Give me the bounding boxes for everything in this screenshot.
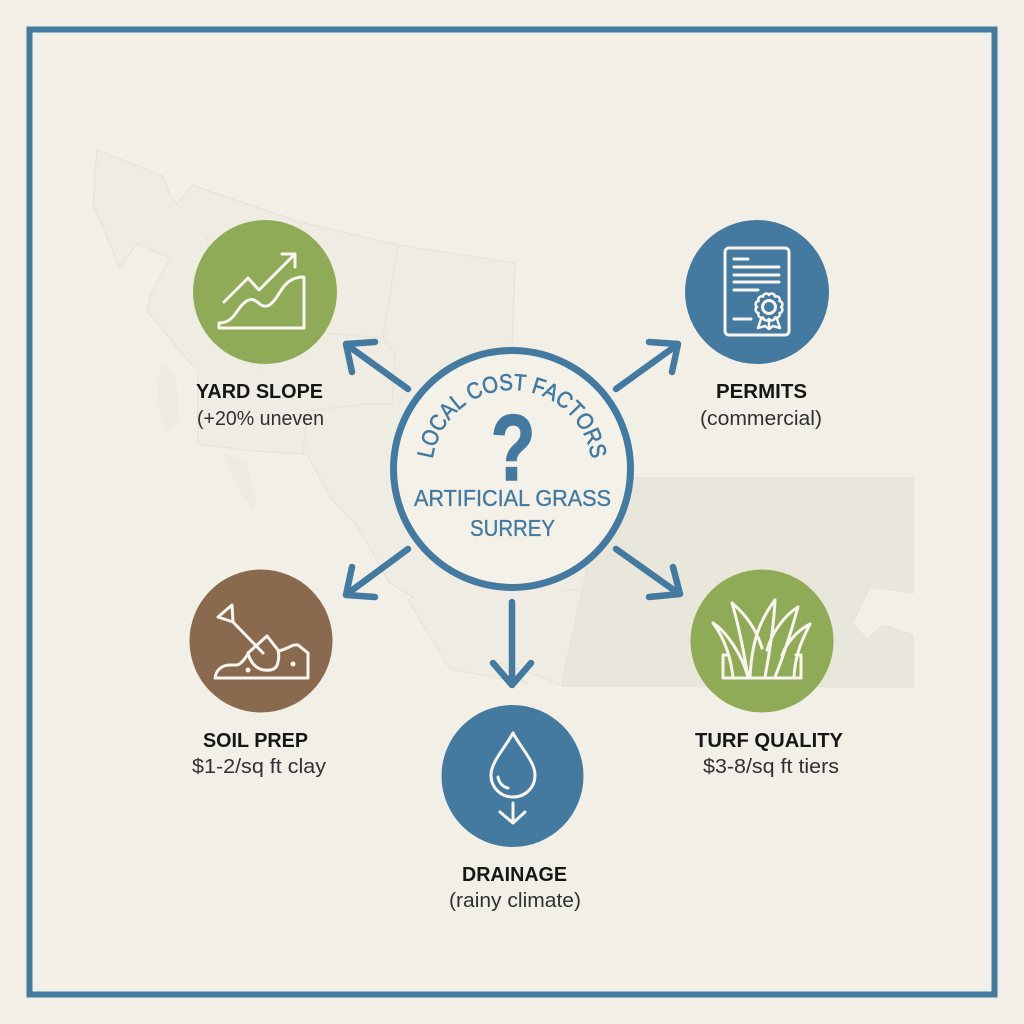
icon: water drop with arrow bbox=[491, 733, 535, 823]
arrow: to soil prep bbox=[346, 549, 408, 597]
arrow: to drainage bbox=[493, 602, 531, 685]
label: turf quality: TURF QUALITY bbox=[695, 730, 844, 752]
arrow: to permits bbox=[616, 342, 678, 389]
label: permits: PERMITS bbox=[716, 381, 807, 403]
factor: yard slope bbox=[193, 220, 337, 430]
factor: permits bbox=[685, 220, 829, 430]
soil dots bbox=[246, 662, 296, 672]
detail: permits: (commercial) bbox=[700, 408, 822, 430]
detail: yard slope: (+20% uneven bbox=[197, 408, 324, 430]
faint regional map bbox=[93, 150, 913, 687]
hub location: SURREY bbox=[470, 515, 555, 541]
hub title: LOCAL COST FACTORS bbox=[417, 374, 606, 458]
detail: turf quality: $3-8/sq ft tiers bbox=[703, 756, 839, 778]
detail: soil prep: $1-2/sq ft clay bbox=[192, 756, 326, 778]
hub subtitle: ARTIFICIAL GRASS bbox=[414, 485, 611, 511]
icon: grass blades bbox=[713, 600, 810, 678]
icon: shovel in soil bbox=[215, 605, 308, 678]
factor: turf quality bbox=[690, 570, 844, 778]
icon: slope chart bbox=[219, 254, 304, 328]
label: drainage: DRAINAGE bbox=[462, 864, 567, 886]
central hub bbox=[390, 347, 634, 591]
factor: soil prep bbox=[190, 570, 332, 778]
detail: drainage: (rainy climate) bbox=[449, 890, 581, 912]
icon: certificate bbox=[725, 248, 789, 335]
question mark: ? bbox=[491, 395, 535, 500]
factor: drainage bbox=[442, 705, 584, 912]
arrow: to yard slope bbox=[346, 342, 408, 389]
arrow: to turf quality bbox=[616, 549, 680, 597]
label: yard slope: YARD SLOPE bbox=[196, 381, 323, 403]
label: soil prep: SOIL PREP bbox=[203, 730, 308, 752]
